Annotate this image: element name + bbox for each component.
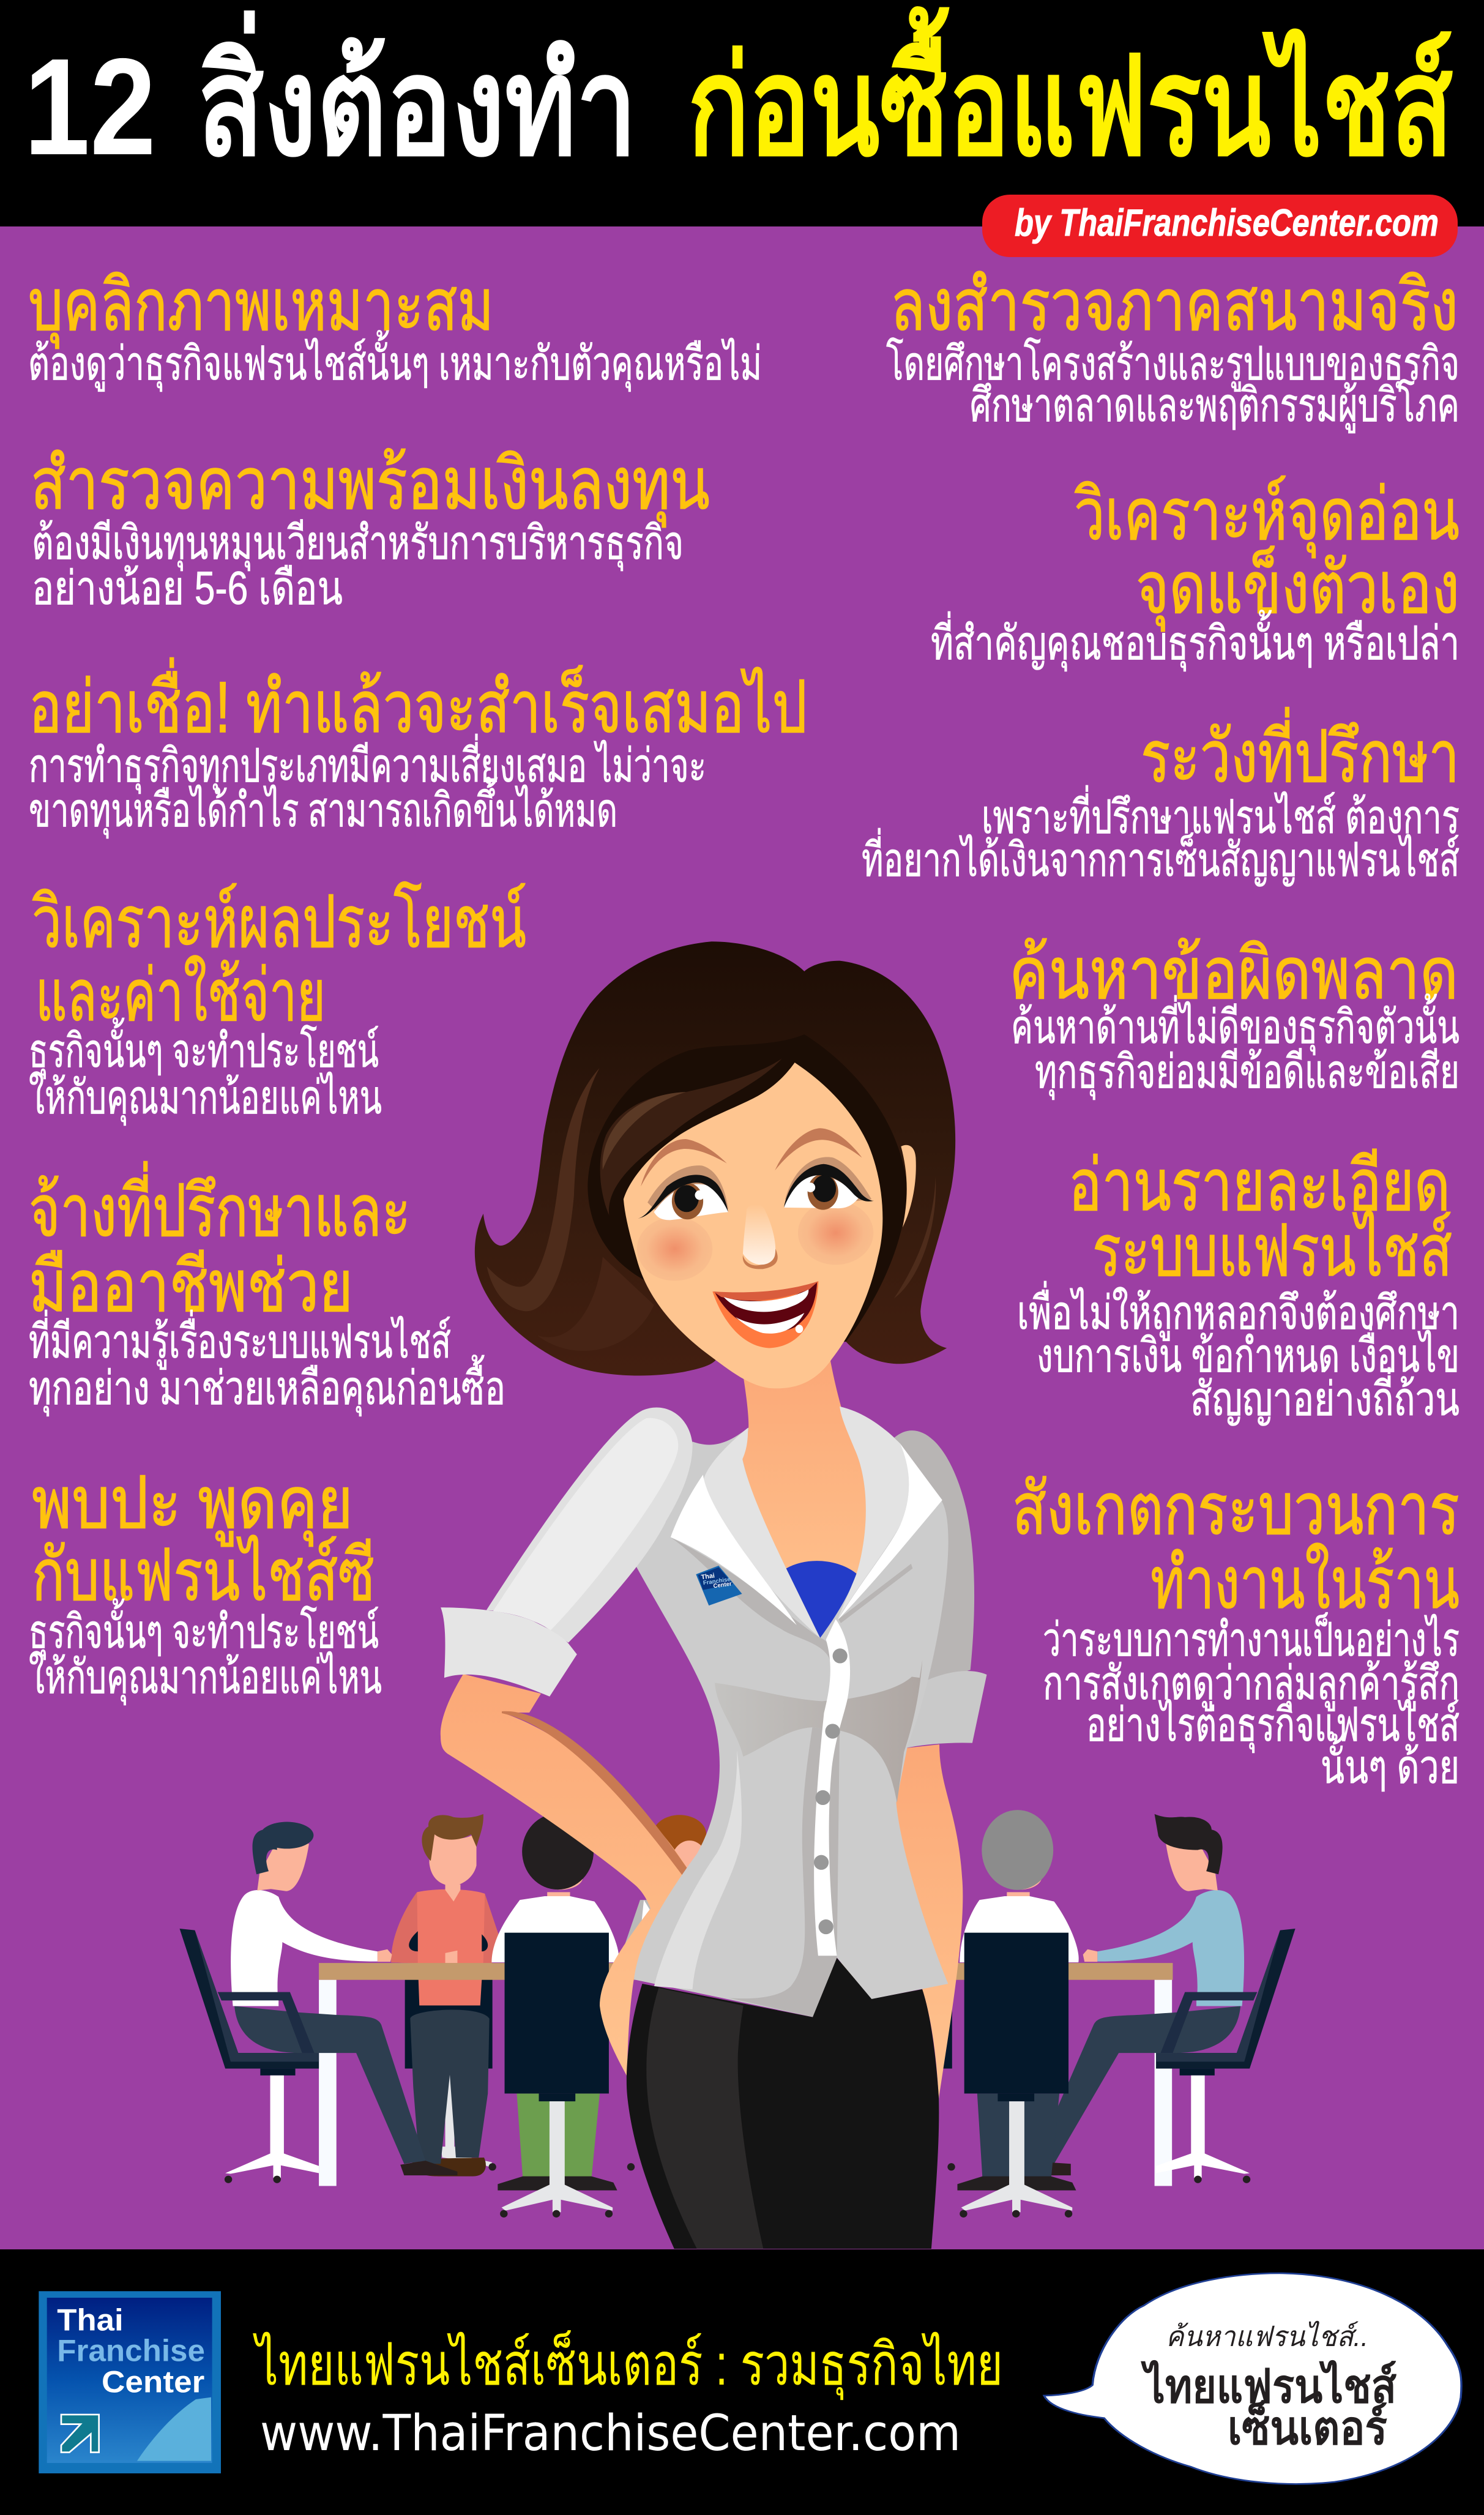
item 2: capital: ต้องมีเงินทุนหมุนเวียนสำหรับการบริหารธุรกิจ [32, 517, 684, 571]
footer logo: Thai [57, 2303, 124, 2337]
footer url: www.ThaiFranchiseCenter.com [260, 2405, 961, 2462]
item 4: benefits: และค่าใช้จ่าย [35, 955, 326, 1036]
item 5: consultant: จ้างที่ปรึกษาและ [29, 1161, 411, 1252]
back-view man with green trousers [491, 1814, 619, 2218]
woman: eyebrows [641, 1139, 727, 1186]
speech bubble [1044, 2273, 1461, 2484]
title: white part: 12 [24, 29, 156, 184]
item 6: meet franchisee [29, 1463, 382, 1705]
header band [0, 0, 1484, 226]
speech bubble: ค้นหาแฟรนไชส์.. [1166, 2320, 1368, 2352]
woman: face [624, 1063, 882, 1388]
woman: left eye [638, 1165, 728, 1220]
item 4: benefits: วิเคราะห์ผลประโยชน์ [32, 882, 526, 963]
footer logo: Franchise [57, 2333, 205, 2367]
item 5: consultant: ทุกอย่าง มาช่วยเหลือคุณก่อนซื้อ [29, 1355, 505, 1416]
right seated man with chair [1024, 1814, 1296, 2183]
speech bubble: ไทยแฟรนไชส์ [1141, 2360, 1397, 2413]
speech bubble: เซ็นเตอร์ [1228, 2400, 1387, 2454]
item 1: personality [28, 265, 762, 392]
item 10: find faults [1009, 933, 1460, 1100]
meeting scene illustration [180, 1810, 1296, 2218]
item 9: beware of consultants [862, 707, 1460, 886]
item 5: consultant: ที่มีความรู้เรื่องระบบแฟรนไชส์ [29, 1310, 451, 1370]
item 3: risk: อย่าเชื่อ! ทำแล้วจะสำเร็จเสมอไป [29, 657, 807, 748]
woman: left sleeve [487, 1407, 693, 1643]
item 3: risk [29, 657, 807, 839]
item 4: benefits [29, 882, 526, 1126]
item 1: personality: ต้องดูว่าธุรกิจแฟรนไชส์นั้นๆ เหมาะกับตัวคุณหรือไม่ [28, 330, 762, 392]
woman: left arm [441, 1674, 689, 2077]
title: white part [24, 10, 637, 184]
item 1: personality: บุคลิกภาพเหมาะสม [28, 265, 494, 349]
item 8: strengths and weaknesses [931, 474, 1460, 671]
item 2: capital: อย่างน้อย 5-6 เดือน [32, 562, 343, 615]
person behind woman [619, 1815, 955, 2170]
woman: right arm [896, 1744, 963, 2099]
footer logo: Center [102, 2364, 204, 2399]
item 4: benefits: ธุรกิจนั้นๆ จะทำประโยชน์ [29, 1017, 379, 1079]
footer logo [39, 2291, 221, 2473]
badge: by ThaiFranchiseCenter.com [982, 195, 1458, 257]
right column text [862, 265, 1460, 1793]
item 5: consultant [29, 1161, 505, 1416]
woman: buttons [814, 1648, 848, 1934]
woman: mouth [712, 1281, 818, 1348]
table [319, 1963, 1173, 2186]
item 5: consultant: มืออาชีพช่วย [29, 1246, 353, 1327]
woman: blue top [786, 1561, 856, 1638]
item 6: meet franchisee: พบปะ พูดคุย [32, 1463, 353, 1547]
item 3: risk: ขาดทุนหรือได้กำไร สามารถเกิดขึ้นได้หมด [29, 777, 617, 839]
woman: right eye [784, 1157, 874, 1210]
woman: back hair [475, 941, 955, 1375]
front-facing man in coral shirt and chair [391, 1814, 502, 2177]
footer band [0, 2249, 1484, 2515]
back-view man with grey hair [957, 1810, 1079, 2218]
woman: name badge: Thai [701, 1572, 715, 1581]
left column text [28, 265, 807, 1705]
woman: name badge: Center [713, 1580, 733, 1590]
left seated man with chair [180, 1822, 457, 2183]
item 6: meet franchisee: ธุรกิจนั้นๆ จะทำประโยชน์ [29, 1598, 379, 1660]
item 7: field survey [886, 265, 1460, 433]
title: white part: สิ่งต้องทำ [198, 10, 637, 184]
woman: placket [814, 1619, 850, 1956]
item 11: read details [1017, 1145, 1460, 1426]
item 4: benefits: ให้กับคุณมากน้อยแค่ไหน [29, 1071, 382, 1126]
woman: right sleeve [884, 1430, 986, 1748]
woman: nose [743, 1249, 778, 1269]
footer tagline: ไทยแฟรนไชส์เซ็นเตอร์ : รวมธุรกิจไทย [253, 2330, 1003, 2401]
woman: inner dark fringe [587, 1034, 907, 1342]
woman: name badge [696, 1566, 742, 1605]
woman: head [475, 941, 955, 1388]
item 2: capital [31, 444, 710, 615]
item 12: observe store [1012, 1469, 1460, 1793]
item 2: capital: สำรวจความพร้อมเงินลงทุน [31, 444, 710, 528]
item 3: risk: การทำธุรกิจทุกประเภทมีความเสี่ยงเสมอ ไม่ว่าจะ [29, 734, 706, 794]
woman: name badge: Franchise [703, 1576, 731, 1586]
item 6: meet franchisee: กับแฟรนไชส์ซี [32, 1535, 375, 1616]
woman: jacket [441, 1358, 949, 2017]
woman: blush [637, 1217, 712, 1281]
woman: ear [901, 1145, 916, 1227]
woman illustration [441, 941, 986, 2249]
woman: neck and chest [740, 1358, 866, 1638]
woman: skirt [627, 1958, 939, 2249]
item 6: meet franchisee: ให้กับคุณมากน้อยแค่ไหน [29, 1651, 382, 1705]
